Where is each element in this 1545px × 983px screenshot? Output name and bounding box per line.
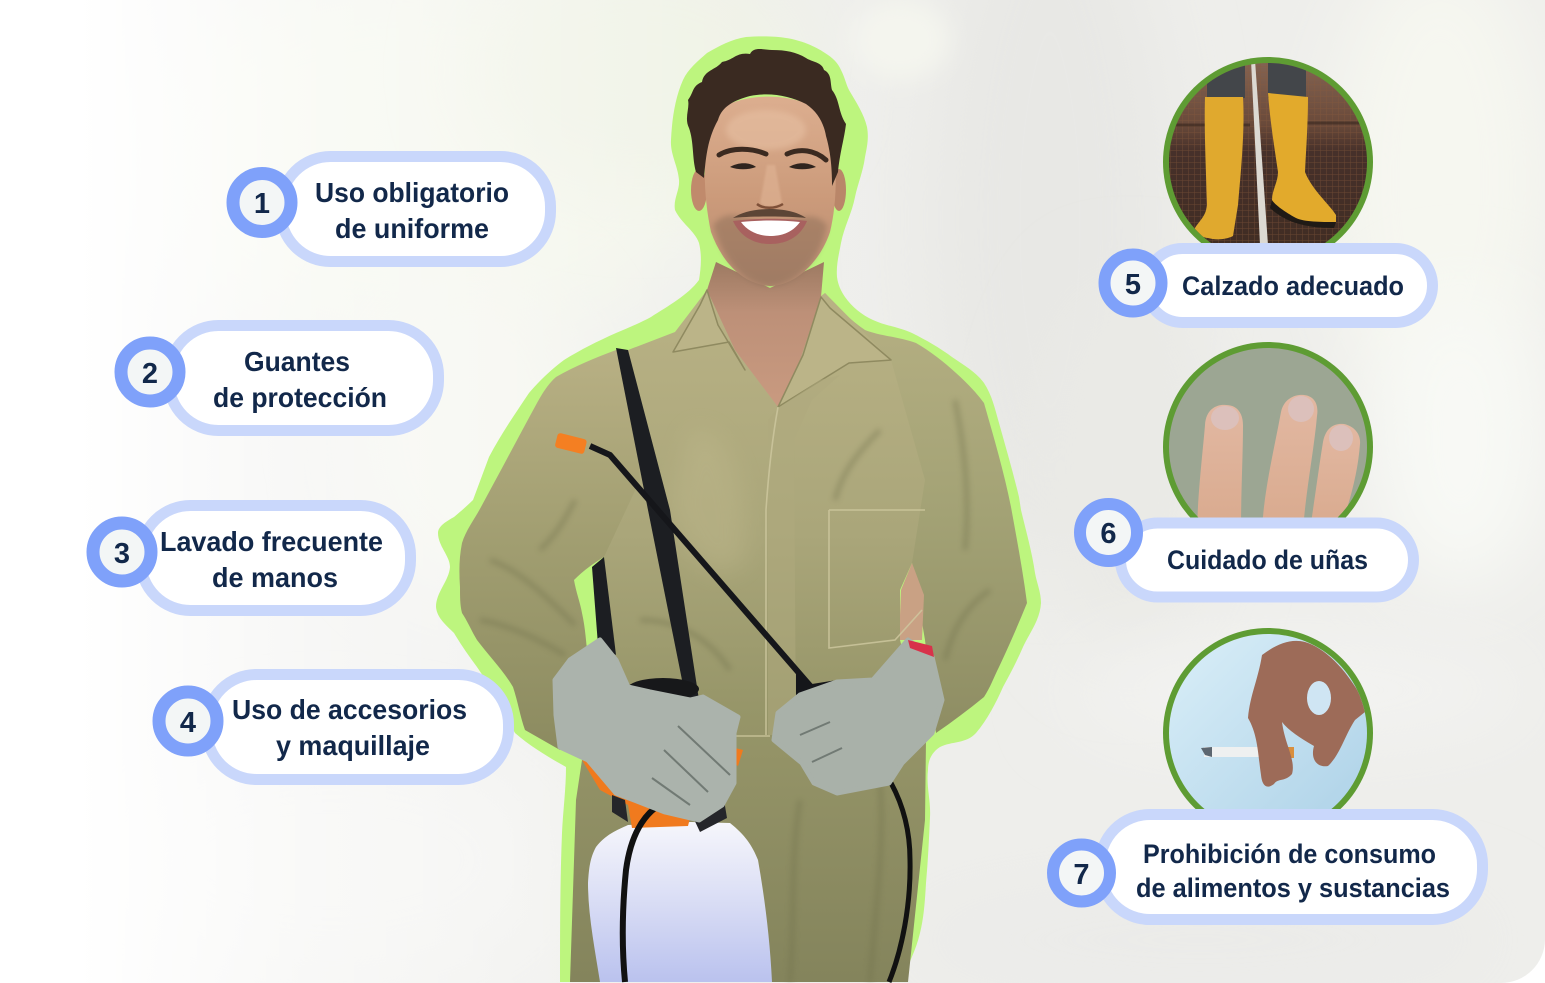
- item 5: calzado: 5: [1125, 269, 1141, 301]
- item 2: guantes: 2: [142, 358, 158, 390]
- hair: [687, 49, 846, 186]
- item 3: lavado de manos: de manos: [212, 562, 338, 593]
- spray wand: [555, 433, 840, 705]
- stubble: [713, 215, 827, 286]
- item 6: uñas: 6: [1100, 518, 1117, 550]
- item 1: uniforme: [233, 156, 550, 262]
- face: [705, 97, 836, 286]
- item 4: accesorios: [159, 674, 508, 780]
- photo: yellow boots: [1163, 57, 1373, 243]
- item 7: prohibición: 7: [1073, 859, 1090, 891]
- head: [687, 49, 846, 286]
- shoulder strap lower: [592, 557, 616, 655]
- item 4: accesorios: y maquillaje: [276, 730, 430, 761]
- photo: hand with cigarette: [1163, 628, 1373, 809]
- clothing folds: [480, 400, 990, 982]
- item 6: uñas: [1080, 504, 1414, 597]
- left sleeve: [459, 350, 650, 750]
- left glove: [555, 640, 738, 820]
- item 2: guantes: [121, 326, 438, 430]
- placket and seams: [768, 375, 840, 735]
- neck and open collar skin: [707, 262, 824, 407]
- collar: [673, 290, 891, 407]
- eyebrows: [719, 149, 766, 155]
- moustache: [733, 209, 806, 218]
- green halo outline: [436, 36, 1041, 982]
- spray hose left: [623, 808, 655, 982]
- spray hose right: [889, 783, 910, 982]
- coverall torso and legs: [570, 290, 926, 982]
- shoulder strap upper: [616, 348, 699, 700]
- ears: [691, 169, 707, 211]
- orange cap tab: [732, 748, 743, 766]
- item 3: lavado de manos: Lavado frecuente: [160, 526, 383, 557]
- right glove lines: [800, 722, 842, 762]
- item 5: calzado: [1104, 248, 1432, 322]
- item 1: uniforme: Uso obligatorio: [315, 177, 509, 208]
- item 7: prohibición: [1053, 814, 1482, 920]
- mouth: [733, 219, 807, 244]
- sprayer handle top: [627, 678, 699, 700]
- highlight on upper shirt: [670, 429, 746, 572]
- red glove strip: [908, 640, 934, 657]
- eyes: [730, 163, 756, 169]
- skin gap at inner right arm: [899, 563, 924, 640]
- teeth: [741, 220, 800, 236]
- item 1: uniforme: 1: [254, 188, 270, 220]
- nose: [760, 165, 782, 207]
- item 7: prohibición: Prohibición de consumo: [1143, 839, 1436, 869]
- item 3: lavado de manos: 3: [114, 538, 130, 570]
- item 4: accesorios: Uso de accesorios: [232, 694, 467, 725]
- item 3: lavado de manos: [93, 506, 410, 610]
- forehead highlight: [726, 110, 806, 150]
- right glove: [774, 640, 942, 793]
- item 6: uñas: Cuidado de uñas: [1167, 545, 1368, 575]
- orange tank cap: [582, 760, 690, 828]
- right sleeve: [825, 293, 1027, 733]
- photo: fingers and nails: [1163, 342, 1373, 518]
- item 4: accesorios: 4: [180, 707, 196, 739]
- tank clasps: [612, 795, 727, 832]
- sprayer tank: [588, 822, 772, 982]
- item 7: prohibición: de alimentos y sustancias: [1136, 873, 1450, 903]
- item 5: calzado: Calzado adecuado: [1182, 271, 1404, 301]
- item 1: uniforme: de uniforme: [335, 213, 489, 244]
- item 2: guantes: de protección: [213, 382, 387, 413]
- left glove finger lines: [652, 726, 730, 805]
- person with sprayer: [436, 36, 1041, 982]
- item 2: guantes: Guantes: [244, 346, 350, 377]
